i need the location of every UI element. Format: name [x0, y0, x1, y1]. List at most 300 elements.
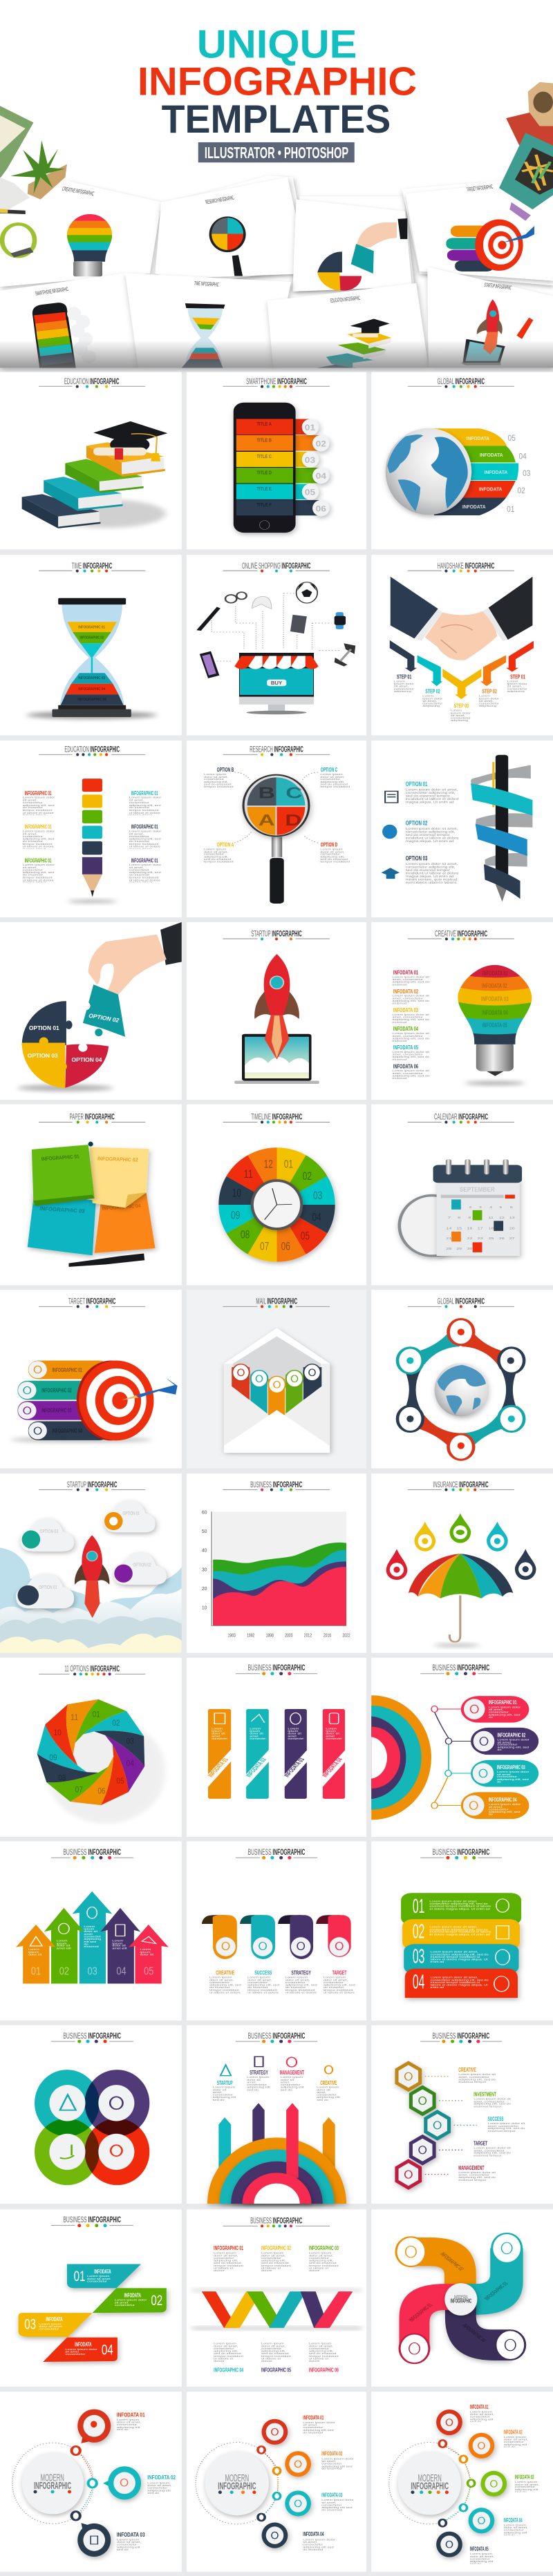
heading: STARTUP INFOGRAPHIC	[251, 930, 302, 939]
timeline nodes	[258, 2446, 281, 2521]
ring centre	[416, 1346, 506, 1433]
mini target	[446, 220, 534, 271]
ring arms	[410, 1332, 512, 1447]
heading: BUSINESS INFOGRAPHIC	[433, 2032, 489, 2041]
panel: w strips: INFOGRAPHIC 06	[309, 2367, 339, 2374]
mini puzzle with hand	[317, 218, 407, 291]
tab: 01	[401, 1893, 521, 1925]
bottom labels	[214, 2343, 340, 2374]
panel: timeline wheel: 03	[313, 1190, 322, 1202]
wheel	[218, 1147, 335, 1262]
panel: pencil: INFOGRAPHIC 01	[131, 791, 158, 796]
option icons	[221, 2057, 332, 2076]
swirl numbers	[49, 1710, 134, 1795]
axes: 1992	[247, 1632, 254, 1639]
calendar: 2	[469, 1205, 472, 1210]
panel: modern three	[0, 2392, 182, 2572]
title: TEMPLATES	[162, 97, 391, 142]
panel: startup clouds	[0, 1473, 182, 1653]
ring nodes	[397, 1319, 524, 1460]
arrow numbers: 02	[59, 1965, 69, 1977]
option texts: OPTION 02	[406, 820, 427, 827]
heading	[408, 562, 514, 573]
panel: umbrella	[371, 1473, 553, 1653]
calendar: 28	[446, 1247, 452, 1251]
ribbon captions: Lorem ipsum dolor sit amet, consectetur adipiscing elit, sed do eiusmod tempor incididunt ut labore et dolore	[209, 1976, 241, 1994]
connector line	[431, 1706, 473, 1809]
drop icons	[393, 1529, 529, 1573]
ribbon captions	[209, 1970, 355, 1996]
option labels: OPTION C	[321, 767, 337, 773]
swirl numbers: 10	[54, 1728, 62, 1737]
puzzle piece: option 01	[22, 1001, 73, 1045]
icon: palette	[382, 825, 397, 839]
top labels: Lorem ipsum dolor sit amet, consectetur adipiscing elit, sed do eiusmod tempor incididunt ut labore et dolore	[214, 2252, 243, 2272]
calendar: 23	[478, 1237, 483, 1241]
hexagon labels: Lorem ipsum dolor sit amet, consectetur adipiscing elit, sed do eiusmod tempor	[474, 2147, 511, 2157]
puzzle piece: option 02: OPTION 02	[88, 1013, 120, 1024]
bubble: 01	[436, 2405, 497, 2435]
axes: 2016	[324, 1632, 331, 1639]
wheel numbers: 02	[303, 1170, 312, 1183]
banner: 04: 04	[102, 2342, 113, 2358]
calendar: 20	[509, 1226, 515, 1230]
circles	[232, 1364, 321, 1393]
panel: pencil	[0, 741, 182, 917]
icon: smart watch	[335, 612, 346, 629]
panel: z banners	[0, 2209, 182, 2387]
icon: report	[385, 791, 398, 803]
heading	[39, 377, 145, 388]
calendar: 26	[499, 1237, 505, 1241]
card: research	[155, 178, 308, 278]
calendar: 11	[489, 1216, 494, 1220]
magnifier	[243, 774, 310, 904]
colour bands: INFODATA	[480, 452, 503, 458]
phone body: TITLE C	[256, 454, 272, 459]
title	[138, 22, 417, 142]
ribbon: pink	[316, 1915, 351, 1957]
globe	[386, 428, 471, 515]
heading	[408, 1297, 514, 1308]
calendar: 7	[448, 1216, 451, 1220]
swirl numbers: 07	[75, 1785, 83, 1795]
puzzle piece: option 04: OPTION 04	[72, 1058, 102, 1063]
light bulb: INFODATA 02	[482, 983, 507, 990]
heading: BUSINESS INFOGRAPHIC	[433, 1849, 489, 1857]
top labels	[214, 2246, 340, 2275]
sleeve	[160, 922, 182, 965]
card titles: EDUCATION INFOGRAPHIC	[330, 296, 361, 304]
step numbers: 02	[517, 486, 525, 495]
heading	[408, 377, 514, 388]
option labels: Lorem ipsum dolor sit amet, consectetur adipiscing elit, sed do eiusmod tempor incididunt	[320, 773, 350, 788]
mini hourglass	[182, 303, 225, 368]
labels: INFODATA 06	[393, 1064, 418, 1070]
banner: 03: INFODATA	[46, 2317, 63, 2323]
heading: BUSINESS INFOGRAPHIC	[250, 2217, 302, 2226]
heading: BUSINESS INFOGRAPHIC	[248, 1664, 305, 1672]
light bulb: INFODATA 05	[482, 1022, 507, 1029]
dotted connectors	[212, 593, 340, 661]
center badge: MODERN	[454, 2294, 468, 2300]
heading	[39, 1113, 145, 1124]
swirl numbers: 01	[93, 1710, 100, 1719]
note: green	[32, 1142, 95, 1206]
bubble: 01: INFODATA 01	[470, 2405, 489, 2410]
hero section: ILLUSTRATOR • PHOTOSHOP	[205, 144, 348, 162]
bubble: 01: INFODATA 01	[303, 2415, 324, 2421]
calendar	[433, 1159, 522, 1256]
heading	[420, 2032, 502, 2043]
clock	[398, 1194, 466, 1257]
icon: dumbbell	[335, 643, 355, 667]
arrow captions: Lorem ipsum dolor sit amet elit	[57, 1940, 71, 1949]
magnifier: A	[258, 812, 275, 830]
center circle: MODERN	[41, 2472, 64, 2483]
cloud: option 01 bottom	[16, 1574, 74, 1608]
hourglass: INFOGRAPHIC 04	[78, 687, 105, 691]
option labels	[204, 767, 351, 864]
rows 3 and 4	[0, 741, 553, 1100]
heading	[223, 377, 330, 388]
bottom labels: Lorem ipsum dolor sit amet, consectetur adipiscing elit, sed do eiusmod tempor incididunt ut labore et dolore	[214, 2343, 243, 2363]
dart	[122, 1378, 178, 1400]
step numbers	[507, 434, 531, 514]
hexagon labels: MANAGEMENT	[458, 2165, 485, 2171]
tab: 02: 02	[413, 1920, 424, 1943]
column: teal: INFODATA 02	[244, 1757, 268, 1778]
top labels: INFOGRAPHIC 01	[214, 2246, 243, 2252]
phone body: TITLE E	[256, 486, 272, 491]
bubble: 02	[285, 2451, 354, 2477]
number bubbles: 02	[316, 439, 326, 449]
bubble: 05: INFODATA 05	[470, 2546, 489, 2553]
axes: 1998	[266, 1632, 274, 1639]
swirl shadow	[46, 1719, 166, 1824]
mini bulb	[67, 214, 113, 276]
hexagon labels: INVESTMENT	[474, 2092, 496, 2098]
axes: 1983	[228, 1632, 236, 1639]
column: orange: INFODATA 01	[206, 1757, 230, 1778]
bubble: 04	[262, 2523, 335, 2551]
title: INFOGRAPHIC	[138, 59, 417, 104]
panel: columns	[187, 1658, 366, 1837]
labels: INFODATA 01	[393, 970, 418, 976]
calendar: 18	[489, 1226, 494, 1230]
tab: 01: Lorem ipsum dolor sit amet, consectetur adipiscing elit, sed do eiusmod tempor incididunt ut labore et dolore magna aliqua. Ut enim ad	[429, 1900, 491, 1910]
arrow captions	[28, 1925, 157, 1958]
column: purple	[282, 1709, 309, 1799]
bottom labels: INFOGRAPHIC 05	[261, 2367, 291, 2374]
arrow numbers: 03	[88, 1965, 97, 1977]
heading: BUSINESS INFOGRAPHIC	[248, 1849, 305, 1857]
center circle	[196, 2442, 279, 2524]
tab: 02: Lorem ipsum dolor sit amet, consectetur adipiscing elit, sed do eiusmod tempor incididunt ut labore et dolore magna aliqua. Ut enim ad	[429, 1926, 491, 1936]
arrow numbers	[31, 1965, 153, 1977]
axes: 60	[202, 1509, 207, 1516]
option texts: Lorem ipsum dolor sit amet, consectetur adipiscing elit sed do	[317, 2086, 340, 2101]
tab: 04: Lorem ipsum dolor sit amet, consectetur adipiscing elit, sed do eiusmod tempor incididunt ut labore et dolore magna aliqua. Ut enim ad	[430, 1976, 489, 1989]
wheel numbers: 10	[232, 1187, 241, 1200]
panel: mail	[187, 1290, 366, 1469]
card stack	[0, 175, 553, 292]
panel: education books	[0, 372, 182, 549]
banner: 03	[19, 2313, 93, 2337]
pill: 03	[471, 1760, 538, 1787]
buy button	[267, 680, 286, 686]
hourglass: INFOGRAPHIC 01	[78, 626, 105, 629]
hexagon labels: CREATIVE	[458, 2068, 476, 2073]
panel: paper notes	[0, 1105, 182, 1285]
number tabs	[291, 419, 323, 515]
card titles: RESEARCH INFOGRAPHIC	[205, 195, 235, 206]
bottom fade	[0, 340, 553, 368]
step numbers: 05	[508, 434, 516, 443]
card: target	[406, 178, 553, 280]
panel: pen ribbon	[371, 741, 553, 917]
panel: modern four	[187, 2392, 366, 2572]
umbrella	[409, 1554, 513, 1647]
calendar: 30	[467, 1247, 473, 1251]
target bars: INFOGRAPHIC 04	[53, 1429, 82, 1434]
heading	[223, 1113, 330, 1124]
monitor	[239, 653, 314, 714]
step labels: STEP 03	[454, 703, 469, 709]
panel: calendar	[371, 1105, 553, 1285]
phone body: TITLE A	[256, 421, 272, 427]
shaking hands	[391, 577, 532, 660]
arrows	[218, 2103, 335, 2202]
arrow numbers: 04	[116, 1965, 126, 1977]
heading	[223, 2217, 330, 2227]
banner: 01	[67, 2264, 141, 2288]
heading	[223, 562, 330, 573]
note: orange: INFOGRAPHIC 04	[102, 1203, 142, 1212]
heading: CALENDAR INFOGRAPHIC	[434, 1113, 488, 1122]
bubble: 01	[77, 2410, 145, 2443]
rows 5 and 6	[0, 1105, 553, 1469]
envelope back	[224, 1328, 330, 1451]
option texts: STRATEGY	[250, 2070, 268, 2076]
tab: 03	[404, 1944, 519, 1974]
card: puzzle	[292, 200, 412, 292]
swirl numbers: 06	[97, 1786, 106, 1795]
magnifier: B	[258, 785, 275, 802]
heading: TIMELINE INFOGRAPHIC	[251, 1113, 302, 1122]
axes: 2012	[304, 1632, 312, 1639]
pill: 04: Lorem ipsum dolor sit amet, consectetur adipiscing elit, sed do	[489, 1803, 521, 1816]
heading: RESEARCH INFOGRAPHIC	[250, 745, 303, 754]
cloud: option 03	[21, 1518, 74, 1552]
ribbon captions: Lorem ipsum dolor sit amet, consectetur adipiscing elit, sed do eiusmod tempor incididunt ut labore et dolore	[285, 1976, 317, 1994]
ribbon: orange	[202, 1915, 237, 1959]
panel: research magnifier	[187, 741, 366, 917]
axes: 10	[202, 1605, 207, 1611]
pill: 03: Lorem ipsum dolor sit amet, consectetur adipiscing elit, sed do	[497, 1771, 529, 1784]
bubble: 02: INFODATA 02	[147, 2475, 176, 2481]
cloud: option 01 top	[104, 1500, 155, 1532]
panel: pinwheel: INFOGRAPHIC	[451, 2298, 471, 2305]
note: teal: INFOGRAPHIC 03	[39, 1206, 85, 1214]
mini books	[317, 318, 391, 368]
left labels	[23, 791, 55, 882]
coloured strips	[232, 1367, 321, 1418]
awning	[234, 656, 319, 669]
magnifier: C	[285, 785, 303, 802]
colour bands	[430, 428, 518, 515]
bottom labels: Lorem ipsum dolor sit amet, consectetur adipiscing elit, sed do eiusmod tempor incididunt ut labore et dolore	[309, 2343, 339, 2363]
calendar: 9	[469, 1216, 471, 1220]
panel: modern five	[371, 2392, 553, 2572]
column: pink	[320, 1709, 348, 1799]
target bars: INFOGRAPHIC 02	[41, 1388, 72, 1394]
puzzle piece: option 02	[81, 984, 125, 1037]
heading	[223, 930, 330, 940]
wheel numbers: 01	[284, 1158, 293, 1171]
ribbon: teal	[240, 1915, 275, 1959]
heading: EDUCATION INFOGRAPHIC	[64, 745, 120, 754]
icons	[60, 2095, 123, 2159]
arrow numbers: 05	[144, 1965, 153, 1977]
bubble: 04	[469, 2508, 531, 2535]
step labels: STEP 02	[425, 689, 440, 695]
panel: handshake	[371, 555, 553, 736]
option labels: OPTION A	[217, 842, 234, 848]
banner: 03: 03	[24, 2316, 36, 2332]
heading: 11 OPTIONS INFOGRAPHIC	[64, 1665, 120, 1674]
rows 1 and 2	[0, 372, 553, 736]
bubble: 03	[480, 2471, 543, 2497]
cloud: option 02	[113, 1552, 167, 1585]
icon: wristwatch	[196, 607, 221, 631]
heading	[51, 2216, 133, 2227]
step numbers: 01	[507, 504, 514, 514]
panel: timeline wheel	[187, 1105, 366, 1285]
heading	[223, 1481, 330, 1491]
axes: 2003	[285, 1632, 292, 1639]
card titles: SMARTPHONE INFOGRAPHIC	[35, 287, 69, 297]
puzzle piece: option 01: OPTION 01	[29, 1026, 59, 1032]
swirl petals	[37, 1699, 144, 1805]
option texts: STARTUP	[217, 2080, 233, 2086]
panel: hexagons	[371, 2025, 553, 2204]
panel: ribbons	[187, 1841, 366, 2021]
heading	[39, 1665, 145, 1675]
panel: rainbow arrows	[187, 2025, 366, 2204]
calendar: 17	[478, 1226, 483, 1230]
arrow numbers: 01	[31, 1965, 41, 1977]
pill: 02: Lorem ipsum dolor sit amet, consectetur adipiscing elit, sed do	[497, 1739, 529, 1751]
column: pink: INFODATA 04	[320, 1757, 344, 1778]
pen	[68, 1254, 144, 1267]
calendar: 8	[458, 1216, 461, 1220]
ribbon front	[471, 783, 532, 899]
heading: INSURANCE INFOGRAPHIC	[433, 1481, 489, 1489]
ribbon captions: SUCCESS	[254, 1970, 272, 1976]
light bulb: INFODATA 03	[481, 996, 509, 1003]
banner: 04: INFODATA	[75, 2342, 92, 2348]
magnifier: D	[285, 812, 302, 830]
hexagon labels: Lorem ipsum dolor sit amet, consectetur adipiscing elit, sed do eiusmod tempor	[458, 2073, 496, 2083]
hexagon labels: Lorem ipsum dolor sit amet, consectetur adipiscing elit, sed do eiusmod tempor	[474, 2098, 511, 2108]
swirl numbers: 03	[126, 1737, 134, 1746]
hexagon labels: TARGET	[474, 2141, 487, 2147]
phone body: TITLE F	[256, 502, 272, 508]
bubble: 01	[262, 2415, 335, 2445]
inner discs	[49, 2085, 134, 2170]
title: UNIQUE	[197, 22, 357, 66]
envelope front flap	[224, 1410, 330, 1453]
target bars: INFOGRAPHIC 03	[41, 1408, 72, 1414]
banner: 04	[43, 2338, 118, 2362]
lower cards	[0, 267, 553, 368]
heading: PAPER INFOGRAPHIC	[70, 1113, 115, 1122]
axes	[202, 1509, 350, 1639]
heading: BUSINESS INFOGRAPHIC	[250, 1481, 302, 1489]
tab: 04	[405, 1969, 518, 1998]
swirl numbers: 09	[49, 1753, 57, 1762]
bubble: 03: Lorem ipsum dolor sit amet, consectetur adipiscing elit sed do	[117, 2539, 141, 2551]
calendar: 27	[509, 1237, 515, 1241]
heading: BUSINESS INFOGRAPHIC	[63, 1849, 121, 1857]
option labels: OPTION D	[321, 842, 337, 848]
wheel numbers	[231, 1158, 322, 1253]
calendar: 3	[479, 1205, 482, 1210]
calendar: 16	[467, 1226, 473, 1230]
heading: HANDSHAKE INFOGRAPHIC	[438, 562, 494, 571]
option texts: Lorem ipsum dolor sit amet, consectetur adipiscing elit sed do	[281, 2076, 303, 2091]
calendar: 22	[467, 1237, 473, 1241]
heading: GLOBAL INFOGRAPHIC	[438, 1297, 485, 1306]
heading	[236, 1664, 317, 1675]
bottom labels: Lorem ipsum dolor sit amet, consectetur adipiscing elit, sed do eiusmod tempor incididunt ut labore et dolore	[261, 2343, 291, 2363]
target bars	[10, 1361, 151, 1442]
wheel numbers: 05	[301, 1230, 310, 1243]
mini rocket and laptop	[460, 299, 533, 365]
tab: 01: 01	[413, 1895, 424, 1917]
option texts	[213, 2070, 341, 2103]
bubble: 02: INFODATA 02	[321, 2451, 343, 2457]
bubble: 03	[285, 2490, 354, 2517]
option texts	[406, 781, 462, 884]
bubble: 01: Lorem ipsum dolor sit amet, consectetur adipiscing elit sed do	[117, 2418, 141, 2431]
note: orange	[95, 1193, 155, 1253]
option texts: MANAGEMENT	[280, 2070, 304, 2076]
cloud: option 02: OPTION 02	[133, 1562, 151, 1567]
center badge	[444, 2283, 477, 2316]
icon: graduation cap	[382, 868, 400, 879]
calendar: 4	[489, 1205, 493, 1210]
number bubbles: 01	[305, 423, 315, 432]
banner: 02: INFODATA	[124, 2293, 141, 2299]
heading: BUSINESS INFOGRAPHIC	[63, 2216, 121, 2224]
heading	[408, 1113, 514, 1124]
drops	[386, 1514, 536, 1580]
calendar: 13	[509, 1216, 515, 1220]
hourglass	[53, 598, 131, 717]
ribbon: purple	[278, 1915, 313, 1959]
panel: global bands	[371, 372, 553, 549]
panel: pencil: INFOGRAPHIC 01	[25, 858, 52, 864]
calendar: 5	[499, 1205, 503, 1210]
labels: INFODATA 02	[393, 989, 418, 995]
number bubbles: 04	[316, 472, 326, 481]
banner: 02	[93, 2288, 167, 2313]
bubble: 04: INFODATA 04	[303, 2532, 324, 2538]
panel: pencil: INFOGRAPHIC 01	[131, 858, 158, 864]
cloud: option 01 bottom: OPTION 01	[39, 1585, 57, 1590]
